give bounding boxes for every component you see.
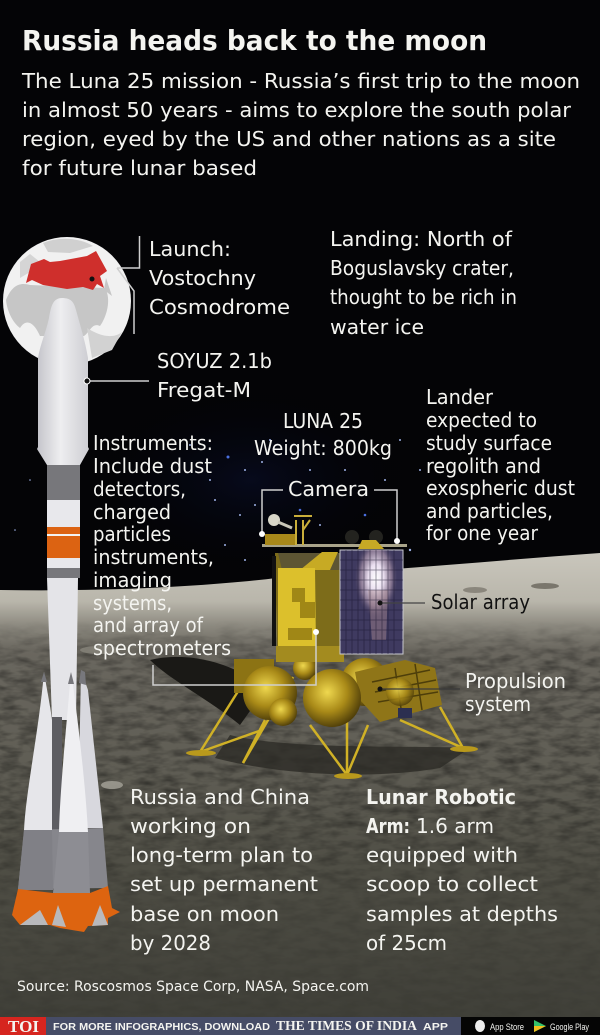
solar array pointer [378, 600, 425, 606]
text: lunar robotic arm: samples at depths [366, 902, 558, 926]
label: propulsion system: Propulsion [465, 669, 566, 693]
rocket: Soyuz [12, 298, 120, 932]
text: lunar robotic arm: equipped with [366, 843, 518, 867]
label: instruments: particles [93, 522, 171, 546]
launch callout lines [117, 236, 140, 334]
lander body [275, 553, 342, 655]
label: lander study: and particles, [426, 499, 553, 523]
label: rocket name: Fregat-M [157, 378, 251, 402]
label: instruments: and array of [93, 613, 204, 637]
label: landing: water ice [330, 315, 424, 339]
label: lander study: expected to [426, 408, 537, 432]
lander legs [186, 677, 478, 779]
label: launch: Launch: [149, 237, 231, 261]
label: lander study [426, 385, 575, 545]
label: lander study: regolith and [426, 454, 541, 478]
camera bracket [259, 490, 400, 544]
footer call to action [53, 1019, 448, 1034]
intro text: region, eyed by the US and other nations as a site [22, 127, 556, 151]
text: Russia and China plan [130, 785, 318, 955]
lander tanks [234, 656, 442, 727]
launch site marker [90, 276, 94, 282]
label: camera: Camera [288, 477, 369, 501]
intro text: for future lunar based [22, 156, 257, 180]
label: rocket name [157, 349, 272, 402]
label: launch: Vostochny [149, 266, 256, 290]
text: lunar robotic arm [366, 785, 558, 955]
label: landing [330, 227, 517, 339]
label: instruments [93, 431, 231, 660]
text: Russia and China plan: by 2028 [130, 931, 211, 955]
intro text [21, 69, 580, 180]
app store badges [461, 1017, 600, 1035]
soyuz callout line [84, 378, 149, 384]
label: landing: Landing: North of [330, 227, 513, 251]
label: propulsion system: system [465, 692, 531, 716]
label: lander study: study surface [426, 431, 552, 455]
label: landing: thought to be rich in [330, 285, 517, 309]
label: launch [149, 237, 290, 319]
text: Russia and China plan: set up permanent [130, 872, 318, 896]
label: instruments: detectors, [93, 477, 186, 501]
label: instruments: instruments, [93, 545, 214, 569]
intro text: The Luna 25 mission - Russia’s first trip to the moon [21, 69, 580, 93]
label: instruments: charged [93, 500, 171, 524]
text: Russia and China plan: long-term plan to [130, 843, 313, 867]
text: Russia and China plan: working on [130, 814, 251, 838]
label: landing: Boguslavsky crater, [330, 256, 514, 280]
top deck and camera mast [262, 514, 407, 549]
app store badges: Google Play [550, 1022, 589, 1032]
text: lunar robotic arm: Arm: [366, 814, 410, 838]
label: propulsion system [465, 669, 566, 716]
Russia [26, 251, 107, 290]
footer call to action: FOR MORE INFOGRAPHICS, DOWNLOAD [53, 1021, 270, 1033]
rocket fairing [37, 298, 89, 465]
label: instruments: spectrometers [93, 636, 231, 660]
label: instruments: imaging [93, 568, 172, 592]
label: luna 25 weight: LUNA 25 [283, 409, 363, 433]
footer call to action: THE TIMES OF INDIA [276, 1019, 418, 1034]
app store badges: App Store [490, 1022, 524, 1032]
rocket boosters [12, 578, 120, 932]
solar panel [340, 550, 403, 654]
label: instruments: Instruments: [93, 431, 213, 455]
text: lunar robotic arm: Lunar Robotic [366, 785, 516, 809]
instruments pointer [153, 629, 319, 685]
label: instruments: Include dust [93, 454, 212, 478]
rocket upper body [47, 465, 80, 578]
label: solar array: Solar array [431, 590, 530, 614]
title: Russia heads back to the moon [22, 24, 487, 57]
label: rocket name: SOYUZ 2.1b [157, 349, 272, 373]
text: lunar robotic arm: scoop to collect [366, 872, 538, 896]
label: lander study: exospheric dust [426, 476, 575, 500]
lander [186, 514, 478, 779]
text: lunar robotic arm: 1.6 arm [416, 814, 494, 838]
footer call to action: APP [423, 1021, 448, 1033]
source: Source: Roscosmos Space Corp, NASA, Space.com [17, 979, 369, 995]
label: luna 25 weight [254, 409, 392, 460]
label: launch: Cosmodrome [149, 295, 290, 319]
label: lander study: for one year [426, 521, 539, 545]
text: lunar robotic arm: of 25cm [366, 931, 447, 955]
background: lunar surface [0, 553, 600, 1035]
intro text: in almost 50 years - aims to explore the south polar [22, 98, 572, 122]
TOI logo [0, 1017, 46, 1035]
propulsion pointer [378, 686, 460, 692]
globe with Russia highlighted [3, 237, 131, 365]
text: Russia and China plan: base on moon [130, 902, 279, 926]
label: instruments: systems, [93, 591, 172, 615]
label: lander study: Lander [426, 385, 494, 409]
label: luna 25 weight: Weight: 800kg [254, 436, 392, 460]
text: Russia and China plan: Russia and China [130, 785, 310, 809]
footer bar [0, 1017, 600, 1035]
